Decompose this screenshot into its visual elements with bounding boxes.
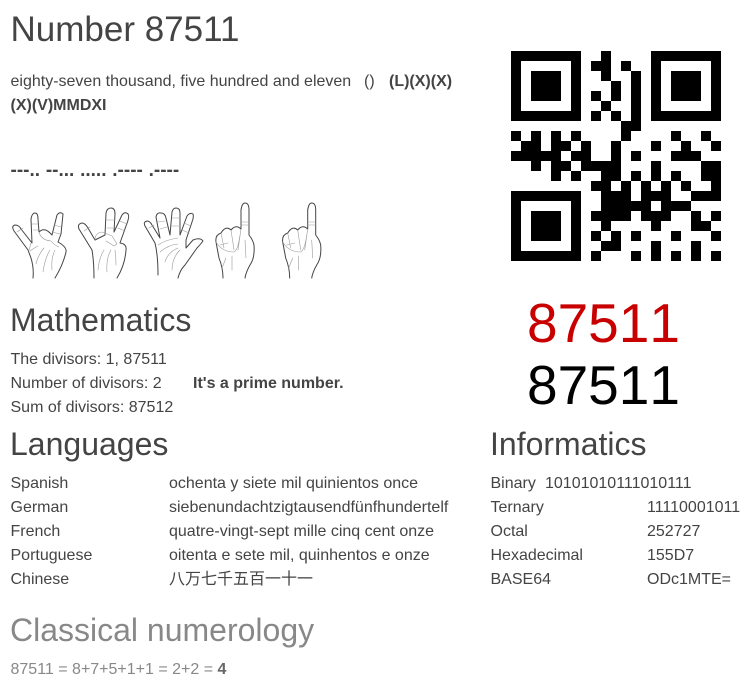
mathematics facts: Sum of divisors: 87512 (10, 399, 173, 416)
icon: hand sign 5 (144, 208, 203, 278)
informatics table: 10101010111010111 (545, 475, 692, 492)
icon: hand sign 1 (283, 203, 321, 278)
language table: siebenundachtzigtausendfünfhundertelf (169, 499, 449, 516)
language table: Chinese (10, 571, 69, 588)
informatics table: 252727 (647, 523, 700, 540)
informatics table: 11110001011 (647, 499, 740, 516)
language table (10, 475, 449, 588)
language table: Spanish (10, 475, 68, 492)
QR code (511, 51, 721, 261)
heading: languages: Languages (10, 426, 168, 462)
numerology sum: 87511 = 8+7+5+1+1 = 2+2 = 4 (10, 661, 227, 678)
informatics table: Hexadecimal (490, 547, 583, 564)
mathematics facts (10, 351, 344, 416)
number in words and roman numeral: () (364, 73, 375, 90)
mathematics facts: Number of divisors: 2 (10, 375, 162, 392)
language table: quatre-vingt-sept mille cinq cent onze (169, 523, 434, 540)
informatics table: 155D7 (647, 547, 694, 564)
title: Number 87511 (10, 10, 239, 49)
language table: oitenta e sete mil, quinhentos e onze (169, 547, 430, 564)
mathematics facts: It's a prime number. (193, 375, 344, 392)
informatics table: Ternary (490, 499, 544, 516)
informatics table (490, 475, 740, 588)
mathematics facts: The divisors: 1, 87511 (10, 351, 167, 368)
informatics table: Octal (490, 523, 528, 540)
language table: French (10, 523, 60, 540)
language table: ochenta y siete mil quinientos once (169, 475, 418, 492)
sign language hands (13, 203, 321, 278)
language table: German (10, 499, 68, 516)
number in words and roman numeral: eighty-seven thousand, five hundred and eleven (10, 73, 351, 90)
number in words and roman numeral: (L)(X)(X) (389, 73, 452, 90)
language table: 八万七千五百一十一 (169, 570, 313, 588)
icon: hand sign 7 (78, 208, 129, 278)
large red number: 87511 (527, 292, 680, 354)
heading: classical numerology: Classical numerology (10, 612, 314, 648)
heading: mathematics: Mathematics (10, 302, 191, 338)
icon: hand sign 8 (13, 213, 66, 278)
informatics table: Binary (490, 475, 536, 492)
informatics table: BASE64 (490, 571, 551, 588)
morse code: ---.. --... ..... .---- .---- (10, 160, 179, 181)
language table: Portuguese (10, 547, 92, 564)
number in words and roman numeral: (X)(V)MMDXI (10, 97, 106, 114)
heading: informatics: Informatics (490, 426, 646, 462)
large black number: 87511 (527, 354, 680, 416)
icon: hand sign 1 (216, 203, 254, 278)
informatics table: ODc1MTE= (647, 571, 731, 588)
number in words and roman numeral (10, 73, 452, 114)
